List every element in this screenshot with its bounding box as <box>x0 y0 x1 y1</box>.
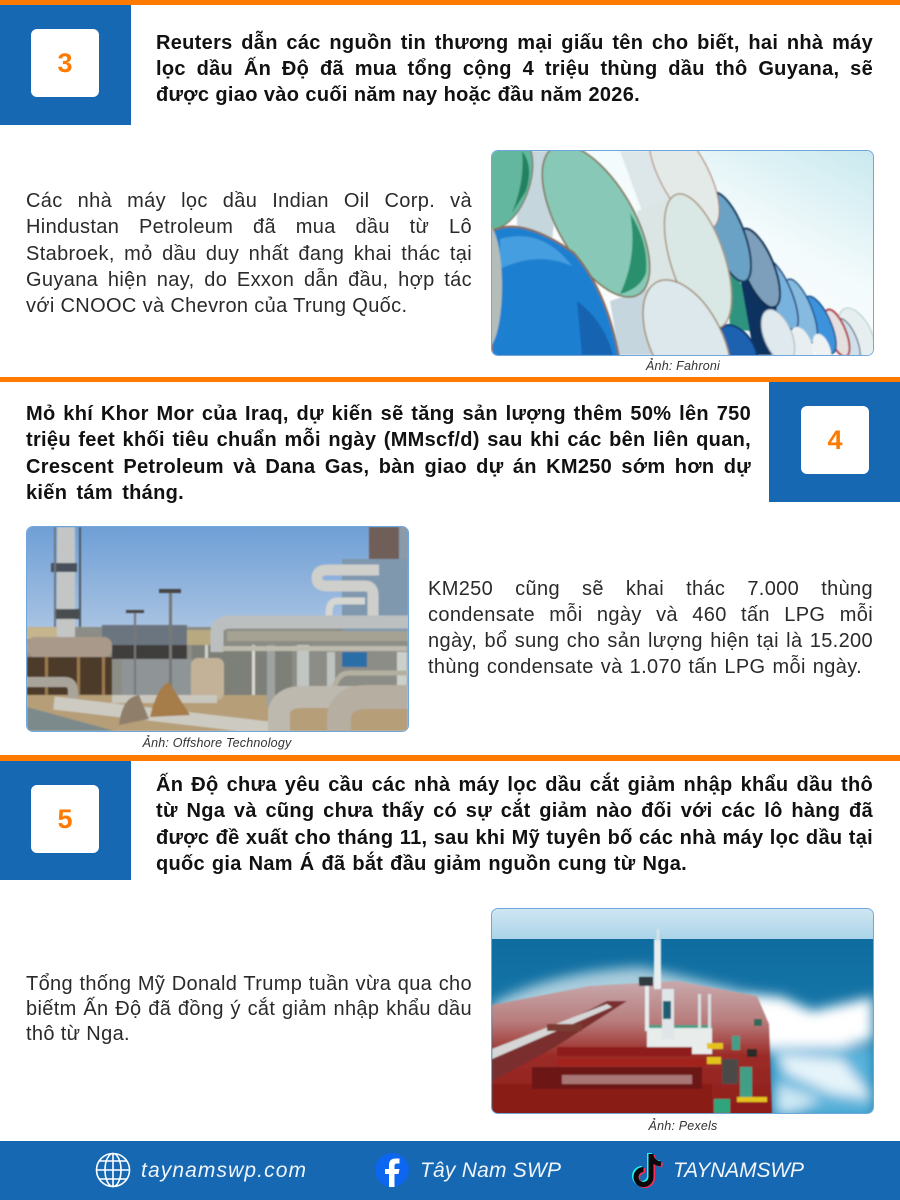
panel: item 3 <box>0 0 900 373</box>
photo: gas processing plant <box>26 526 409 732</box>
heading: item 4: Crescent Petroleum và Dana Gas, bàn giao dự án KM250 sớm hơn dự <box>26 456 751 478</box>
panel: item 5 <box>0 755 900 1133</box>
heading: item 5 <box>156 772 873 875</box>
far right row <box>831 302 883 370</box>
heading: item 4: kiến tám tháng. <box>26 482 184 504</box>
text block: item 4 paragraph: KM250 cũng sẽ khai thác 7.000 thùng <box>428 578 873 600</box>
text block: item 3 paragraph: Các nhà máy lọc dầu Indian Oil Corp. và <box>26 190 472 212</box>
heading: item 3: Reuters dẫn các nguồn tin thương mại giấu tên cho biết, hai nhà máy <box>156 32 873 54</box>
heading: item 5: từ Nga và cũng chưa thấy có sự cắt giảm nào đối với các lô hàng đã <box>156 800 873 822</box>
number badge 5 <box>0 761 131 880</box>
foreground pipes <box>54 703 277 729</box>
text block: item 4 paragraph: thùng condensate và 1.070 tấn LPG mỗi ngày. <box>428 656 862 678</box>
number badge 3: 3 <box>57 48 73 78</box>
heading: item 4: triệu feet khối tiêu chuẩn mỗi ngày (MMscf/d) sau khi các bên liên quan, <box>26 429 751 451</box>
number badge 4 <box>769 382 900 502</box>
website link: taynamswp.com <box>141 1159 306 1182</box>
icon: tiktok <box>634 1153 662 1186</box>
text block: item 3 paragraph: với CNOOC và Chevron của Trung Quốc. <box>26 295 407 317</box>
photo: oil barrels <box>491 150 874 356</box>
text block: item 5 paragraph <box>26 973 472 1045</box>
big blue <box>492 227 619 357</box>
barrel bodies <box>517 151 562 241</box>
text block: item 4 paragraph: ngày, bổ sung cho sản lượng hiện tại là 15.200 <box>428 630 873 652</box>
insulation <box>191 658 224 700</box>
heading: item 5: Ấn Độ chưa yêu cầu các nhà máy lọc dầu cắt giảm nhập khẩu dầu thô <box>156 774 873 796</box>
heading: item 4: Mỏ khí Khor Mor của Iraq, dự kiến sẽ tăng sản lượng thêm 50% lên 750 <box>26 403 751 425</box>
heading: item 5: quốc gia Nam Á đã bắt đầu giảm nguồn cung từ Nga. <box>156 853 687 875</box>
white faces <box>635 111 733 239</box>
caption: photo credit Offshore Technology: Ảnh: Offshore Technology <box>143 736 291 750</box>
right building <box>369 527 408 559</box>
accent bar: item 4 <box>0 377 900 382</box>
overhead pipe and frame <box>192 645 292 695</box>
heading: item 3 <box>156 30 873 106</box>
heading: item 5: được đề xuất cho tháng 11, sau khi Mỹ tuyên bố các nhà máy lọc dầu tại <box>156 827 873 849</box>
text block: item 3 paragraph <box>26 190 472 317</box>
facebook page name: Tây Nam SWP <box>420 1159 561 1182</box>
accent bar: item 5 <box>0 755 900 761</box>
text block: item 3 paragraph: Stabroek, mỏ dầu duy nhất đang khai thác tại <box>26 243 472 265</box>
lamps <box>134 612 136 697</box>
text block: item 3 paragraph: Hindustan Petroleum đã mua dầu từ Lô <box>26 216 472 238</box>
caption: photo credit Fahroni: Ảnh: Fahroni <box>646 359 720 373</box>
accent bar: item 3 <box>0 0 900 5</box>
text block: item 5 paragraph: Tổng thống Mỹ Donald Trump tuần vừa qua cho <box>26 973 472 995</box>
text block: item 5 paragraph: thô từ Nga. <box>26 1023 130 1045</box>
heading: item 4 <box>26 403 751 504</box>
text block: item 4 paragraph: condensate mỗi ngày và 460 tấn LPG mỗi <box>428 604 873 626</box>
number badge 3 <box>0 5 131 125</box>
text block: item 4 paragraph <box>428 578 873 678</box>
footer <box>0 1141 900 1200</box>
text block: item 5 paragraph: biếtm Ấn Độ đã đồng ý cắt giảm nhập khẩu dầu <box>26 998 472 1020</box>
number badge 5: 5 <box>57 804 73 834</box>
photo: oil tanker at sea <box>491 908 874 1114</box>
stack <box>57 527 75 637</box>
icon: facebook <box>375 1153 409 1187</box>
icon: globe <box>96 1154 130 1186</box>
number badge 4: 4 <box>827 425 843 455</box>
tiktok handle: TAYNAMSWP <box>673 1159 804 1182</box>
heading: item 3: lọc dầu Ấn Độ đã mua tổng cộng 4 triệu thùng dầu thô Guyana, sẽ <box>156 58 873 80</box>
teal faces <box>521 128 671 314</box>
panel: item 4 <box>0 377 900 750</box>
heading: item 3: được giao vào cuối năm nay hoặc đầu năm 2026. <box>156 84 640 106</box>
text block: item 3 paragraph: Guyana hiện nay, do Exxon dẫn đầu, hợp tác <box>26 269 472 291</box>
caption: photo credit Pexels: Ảnh: Pexels <box>649 1119 717 1133</box>
